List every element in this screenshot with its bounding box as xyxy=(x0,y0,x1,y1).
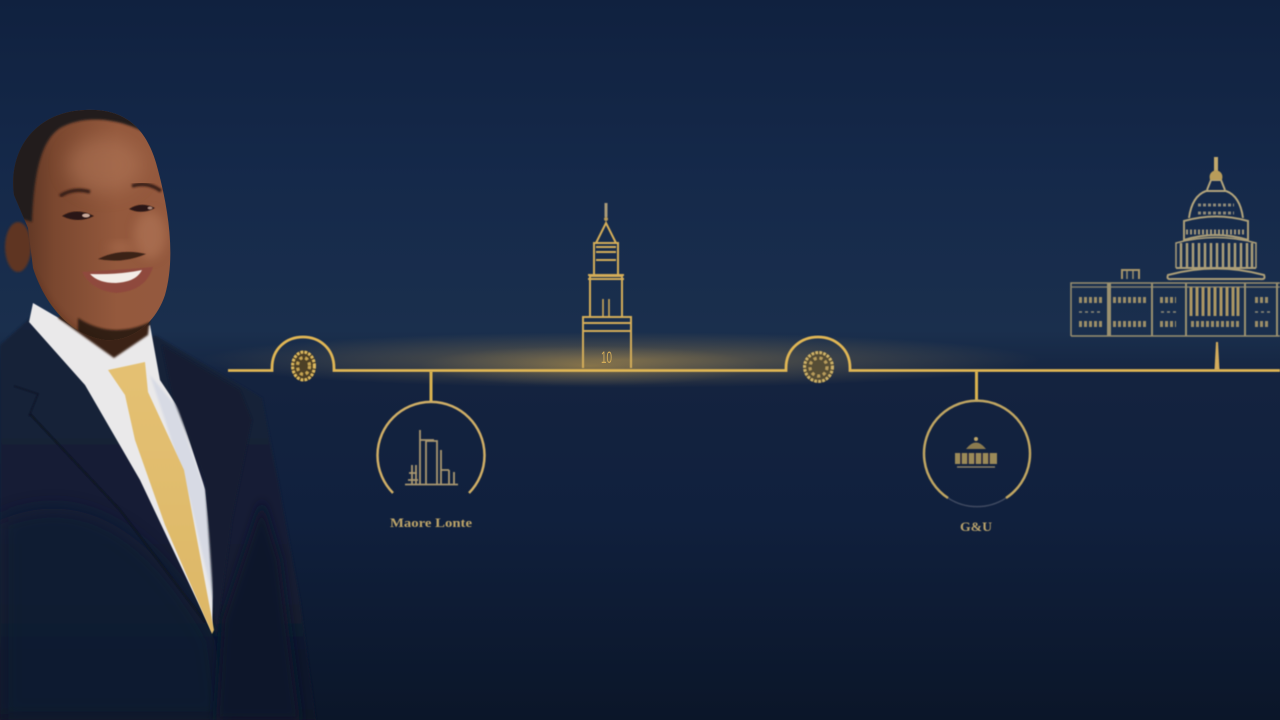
head xyxy=(13,110,170,340)
forehead highlight xyxy=(67,137,143,193)
label: right circle: G&U xyxy=(960,519,993,534)
label: left circle: Maore Lonte xyxy=(390,515,472,530)
sleeve shading xyxy=(216,500,300,720)
ear xyxy=(5,222,31,272)
tower number: 10 xyxy=(601,348,612,367)
teeth xyxy=(90,270,142,283)
icon: clock tower xyxy=(582,203,632,368)
hair xyxy=(13,110,140,223)
eyes xyxy=(62,205,155,220)
icon: capitol building xyxy=(1071,157,1280,336)
icon: city skyline xyxy=(405,430,458,484)
timeline glow xyxy=(200,332,1040,388)
cheek highlight xyxy=(134,211,166,259)
jaw shade xyxy=(46,296,78,330)
shirt shade right xyxy=(150,375,213,600)
person xyxy=(0,100,316,720)
jacket lower shading xyxy=(0,509,225,720)
nose xyxy=(106,242,136,253)
lapel notch xyxy=(14,386,38,416)
right lapel xyxy=(162,345,252,640)
window columns xyxy=(1191,287,1238,316)
neck xyxy=(58,280,152,358)
icon: small capitol xyxy=(955,437,997,467)
connector and left circle xyxy=(377,371,484,493)
jacket xyxy=(0,318,316,720)
moustache xyxy=(98,252,146,261)
shirt xyxy=(29,303,214,632)
connector and right circle xyxy=(924,371,1030,507)
brows xyxy=(60,184,161,196)
mouth xyxy=(82,267,153,293)
icon: medallion two xyxy=(803,351,834,383)
connector: capitol xyxy=(1214,342,1220,370)
icon: medallion one xyxy=(291,350,316,382)
lapel line xyxy=(30,414,205,622)
dome xyxy=(1168,268,1264,279)
beard xyxy=(76,317,150,340)
tie xyxy=(108,362,214,634)
timeline line xyxy=(228,337,1280,370)
